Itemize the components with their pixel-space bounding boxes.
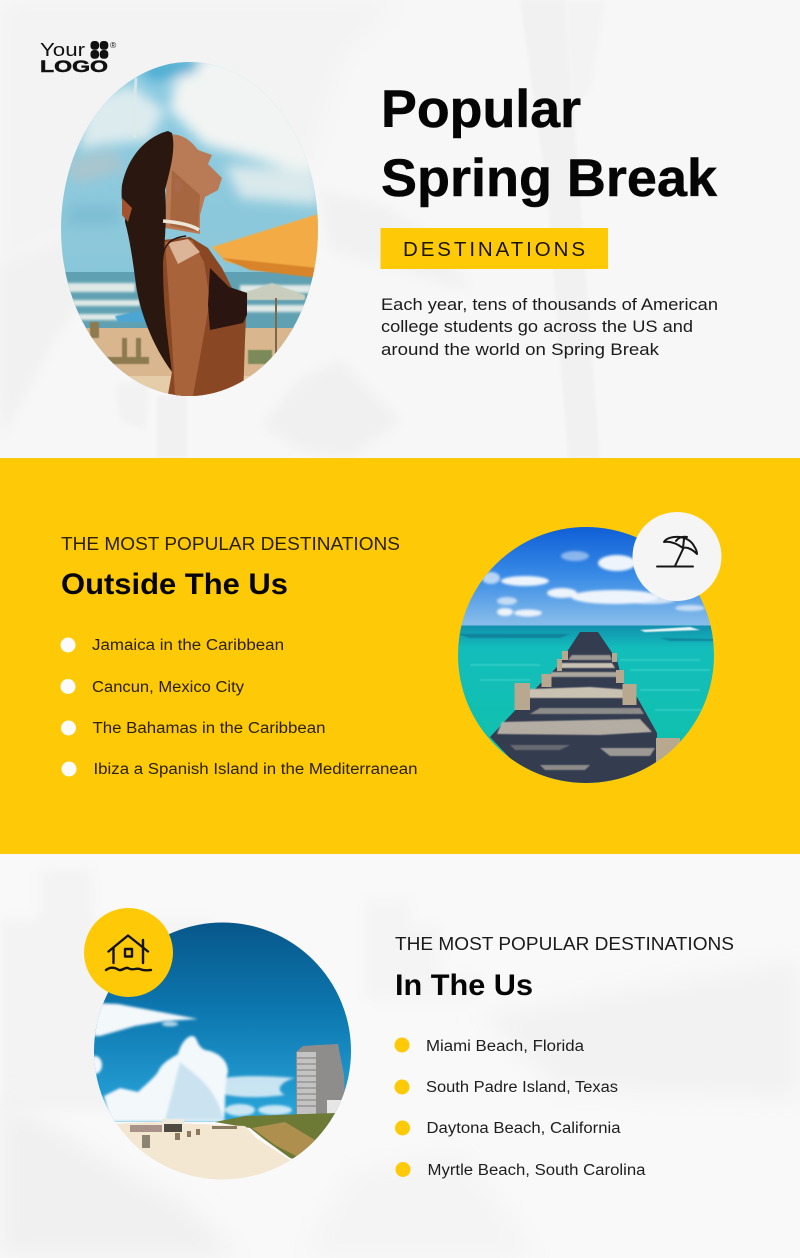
towers [296,1044,345,1115]
intro paragraph: college students go across the US and [381,317,693,336]
panel: outside the US [0,458,800,854]
section heading [61,533,400,601]
section heading: Outside The Us [61,568,288,601]
photo: Miami beach skyline [88,922,352,1190]
logo mark [90,41,108,59]
sea [60,272,320,332]
destination list: in the US: Myrtle Beach, South Carolina [428,1162,646,1179]
black top [208,268,247,330]
beach chairs and person [90,310,272,364]
small umbrella [247,283,305,300]
title [381,80,718,208]
hair [122,131,173,372]
destination list: in the US: Miami Beach, Florida [426,1038,584,1055]
destination list: Jamaica in the Caribbean [92,637,284,654]
clouds [482,551,705,616]
sky clouds [68,62,317,224]
ear [174,179,182,193]
destination list: Cancun, Mexico City [92,679,244,696]
pier posts [514,651,680,762]
section heading: in the US: In The Us [395,969,533,1002]
pier deck [490,632,657,790]
intro paragraph [381,295,718,359]
title: Spring Break [381,149,718,208]
background: faded palm trees [0,0,800,458]
shrubs and dune [215,1113,335,1159]
neck and head [165,134,222,234]
water stream [134,78,136,138]
necklace [163,221,199,230]
destination list: The Bahamas in the Caribbean [92,720,326,737]
sand [86,328,293,396]
section heading: THE MOST POPULAR DESTINATIONS [61,533,400,554]
intro paragraph: around the world on Spring Break [381,340,660,359]
section heading: in the US: THE MOST POPULAR DESTINATIONS [395,933,734,954]
destination list: in the US [394,1038,646,1179]
destination list: in the US: Daytona Beach, California [426,1120,621,1137]
logo: Your [40,40,85,60]
logo [40,40,117,76]
section heading: in the US [395,933,734,1002]
subtitle badge [380,228,608,269]
destination list: in the US: South Padre Island, Texas [426,1079,618,1096]
logo: ® [110,40,117,50]
destination list [60,637,418,778]
clouds [88,1003,295,1122]
logo: LOGO [40,57,108,76]
cabanas [130,1119,237,1148]
sunlit planks [497,655,655,770]
icon: beach umbrella [632,512,722,601]
orange umbrella [212,214,318,277]
intro paragraph: Each year, tens of thousands of American [381,295,718,314]
icon: flooded house [84,908,173,997]
destination list: Ibiza a Spanish Island in the Mediterranean [94,761,418,778]
photo: woman at the beach [60,55,330,400]
photo: wooden pier over turquoise sea [458,527,714,790]
sea [458,626,714,784]
arm and torso [160,237,247,400]
subtitle badge: DESTINATIONS [403,238,585,261]
sand [116,1122,290,1180]
background: faded city beach [0,854,800,1258]
title: Popular [381,80,581,139]
